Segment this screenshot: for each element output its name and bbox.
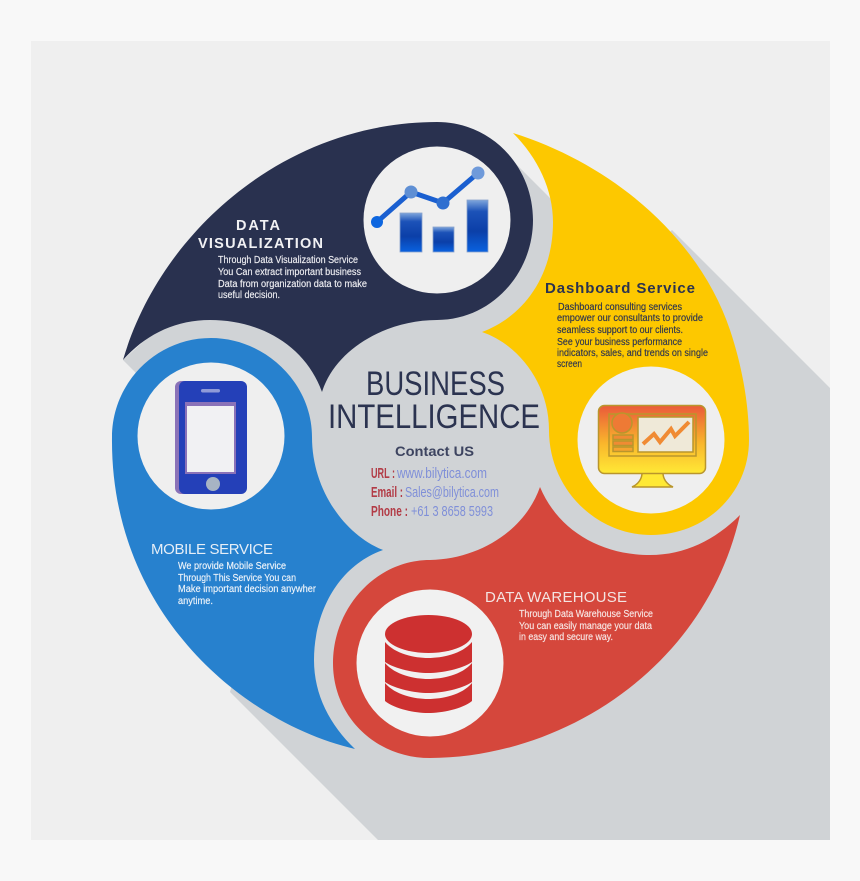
panel: data visualization xyxy=(123,122,533,392)
description: indicators, sales, and trends on single xyxy=(557,348,709,359)
contact details: Phone : xyxy=(371,504,408,520)
contact details: +61 3 8658 5993 xyxy=(411,504,493,520)
heading: MOBILE SERVICE xyxy=(151,541,273,558)
title: BUSINESS xyxy=(366,365,505,403)
description: Dashboard consulting services xyxy=(558,302,682,313)
panel: mobile service xyxy=(112,338,383,749)
panel: data warehouse xyxy=(333,487,740,758)
description: seamless support to our clients. xyxy=(557,325,683,336)
description: See your business performance xyxy=(557,337,682,348)
contact heading: Contact US xyxy=(395,443,474,459)
icon circle xyxy=(138,362,284,510)
title xyxy=(328,365,540,436)
heading: DATA xyxy=(236,218,281,234)
heading: VISUALIZATION xyxy=(198,236,323,252)
description: anytime. xyxy=(178,596,213,607)
description: You can easily manage your data xyxy=(519,621,653,632)
panel: dashboard service xyxy=(482,133,749,535)
red petal xyxy=(333,487,740,758)
description: Data from organization data to make xyxy=(218,279,368,290)
yellow petal xyxy=(482,133,749,535)
navy petal xyxy=(123,122,533,392)
long shadow xyxy=(123,165,830,840)
description: screen xyxy=(557,359,582,370)
description: Through Data Warehouse Service xyxy=(519,609,653,620)
icon: database xyxy=(385,615,472,713)
title: INTELLIGENCE xyxy=(328,398,540,436)
description: We provide Mobile Service xyxy=(178,561,287,572)
description xyxy=(178,561,317,607)
description: Through This Service You can xyxy=(178,573,296,584)
blue petal xyxy=(112,338,383,749)
heading xyxy=(198,218,323,252)
icon circle xyxy=(364,146,510,294)
icon: smartphone xyxy=(175,381,247,494)
contact details: Sales@bilytica.com xyxy=(405,485,499,501)
icon circle xyxy=(356,590,504,736)
icon circle xyxy=(578,366,724,514)
heading: Dashboard Service xyxy=(545,280,695,297)
description xyxy=(218,255,368,301)
description: Make important decision anywher xyxy=(178,584,317,595)
description: useful decision. xyxy=(218,290,280,301)
description xyxy=(519,609,653,643)
description: You Can extract important business xyxy=(218,267,361,278)
description: empower our consultants to provide xyxy=(557,313,704,324)
description: Through Data Visualization Service xyxy=(218,255,359,266)
contact details: URL : xyxy=(371,466,395,482)
center: title and contact xyxy=(328,365,540,520)
contact details: www.bilytica.com xyxy=(396,466,487,482)
icon: bar and line chart xyxy=(371,166,488,252)
heading: DATA WAREHOUSE xyxy=(485,589,627,606)
icon: dashboard monitor xyxy=(598,406,706,487)
contact details xyxy=(371,466,499,520)
contact details: Email : xyxy=(371,485,403,501)
description: in easy and secure way. xyxy=(519,632,613,643)
description xyxy=(557,302,709,370)
